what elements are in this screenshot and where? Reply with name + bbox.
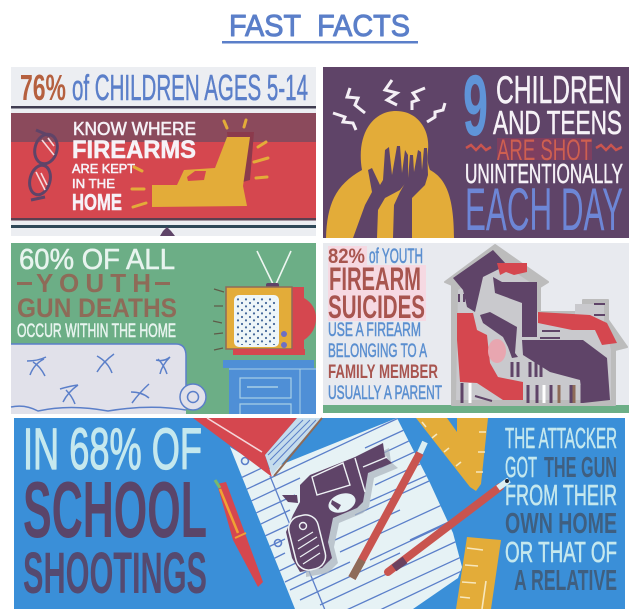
icon: small figure (160, 227, 175, 236)
text: in 68% of school shootings: SHOOTINGS (23, 541, 207, 606)
icon: handgun (132, 120, 268, 207)
text: 9 children and teens are shot unintentionally each day (463, 58, 623, 243)
illustration: lined paper (230, 418, 462, 609)
text: the attacker got the gun from their own home or that of a relative (505, 423, 617, 597)
text: know where firearms are kept in the home: KNOW WHERE (73, 119, 196, 139)
illustration: revolver (282, 443, 398, 577)
heading: 76% of children ages 5-14 (20, 67, 308, 108)
panel: 60% of all youth gun deaths (11, 243, 316, 414)
illustration: house made of guns (445, 245, 627, 405)
panel: 82% of youth firearm suicides (323, 243, 629, 413)
text: know where firearms are kept in the home: FIREARMS (72, 136, 196, 164)
text: 9 children and teens are shot unintentionally each day: 9 (463, 58, 488, 154)
icon: right hand (393, 148, 428, 238)
icon: red pistol large (457, 313, 523, 400)
illustration: pencil one (352, 442, 425, 578)
icon: glasses (26, 130, 61, 200)
text: 60% of all youth gun deaths occur within the home: GUN DEATHS (17, 293, 177, 323)
illustration: notebook corner (193, 418, 322, 477)
text: 60% of all youth gun deaths occur within the home: 60% OF ALL (19, 244, 175, 276)
icon: left hand (353, 146, 408, 238)
text: know where firearms are kept in the home: ARE KEPT (72, 161, 135, 176)
panel: children know where firearms are kept (11, 67, 316, 236)
text: 82% of youth firearm suicides: 82% (328, 245, 365, 268)
text: in 68% of school shootings: SCHOOL (23, 465, 207, 554)
illustration: triangle ruler (416, 418, 488, 491)
text: 82% of youth firearm suicides: USE A FIREARM (328, 320, 421, 341)
heading: 76% of children ages 5-14: 76% (20, 67, 66, 108)
illustration: ruler (456, 537, 501, 609)
text: 60% of all youth gun deaths occur within the home: Y O U T H (36, 268, 151, 298)
icon: red pistol right (538, 312, 617, 345)
text: know where firearms are kept in the home: IN THE (72, 176, 115, 191)
illustration: person covering face (326, 80, 454, 238)
text: in 68% of school shootings (23, 417, 207, 606)
text: 60% of all youth gun deaths occur within the home (17, 244, 177, 342)
heading: 76% of children ages 5-14: of CHILDREN AGES 5-14 (72, 67, 308, 108)
illustration: television on cabinet (213, 251, 316, 414)
text: 82% of youth firearm suicides: SUICIDES (328, 289, 425, 325)
text: 82% of youth firearm suicides: of YOUTH (369, 245, 423, 268)
text: know where firearms are kept in the home (72, 119, 196, 215)
text: 82% of youth firearm suicides: FAMILY MEMBER (328, 362, 438, 383)
text: 82% of youth firearm suicides (328, 245, 442, 404)
text: the attacker got the gun from their own home or that of a relative: GOT (505, 452, 537, 484)
text: 82% of youth firearm suicides: USUALLY A PARENT (328, 383, 442, 404)
icon: tv static (236, 297, 277, 345)
text: 60% of all youth gun deaths occur within the home: OCCUR WITHIN THE HOME (17, 321, 176, 342)
icon: stress zigzags (333, 80, 445, 130)
title: FAST FACTS (229, 8, 410, 43)
icon: purple pistol top (453, 250, 507, 312)
text: 82% of youth firearm suicides: FIREARM (329, 261, 421, 297)
illustration: red pen (215, 480, 263, 587)
illustration: pencil two (388, 479, 509, 572)
panel: school shootings (14, 403, 625, 613)
icon: antenna (257, 251, 291, 284)
text: in 68% of school shootings: IN 68% OF (23, 417, 202, 482)
panel: 9 children and teens (323, 58, 629, 243)
icon: purple pistol large (522, 340, 610, 403)
illustration: sofa (11, 344, 206, 414)
text: 82% of youth firearm suicides: BELONGING TO A (328, 341, 427, 362)
text: know where firearms are kept in the home: HOME (72, 189, 122, 215)
